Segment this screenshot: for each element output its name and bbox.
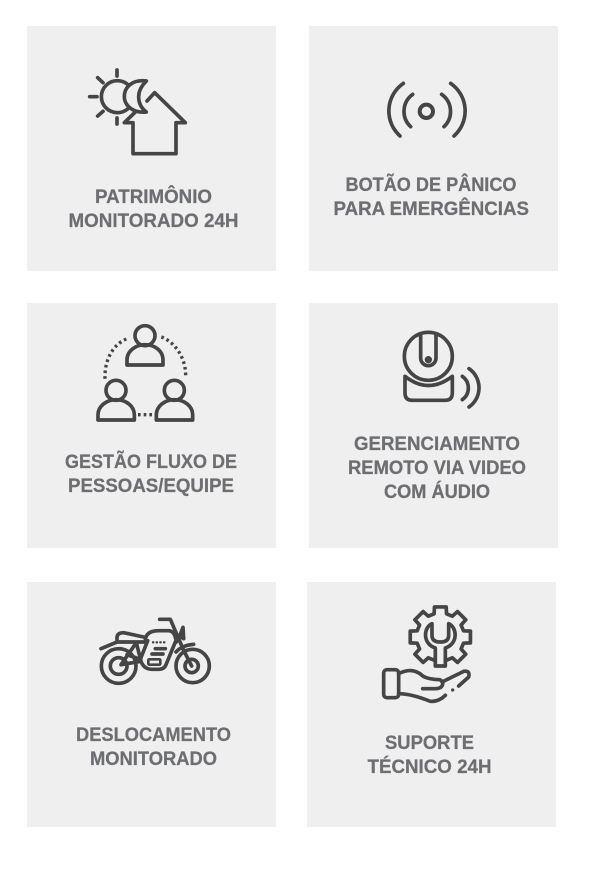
icon: three connected people xyxy=(98,326,193,420)
icon: dome camera with sound waves xyxy=(404,332,479,407)
label: gerenciamento remoto via video com áudio: REMOTO VIA VIDEO xyxy=(348,458,526,479)
panel: gerenciamento remoto xyxy=(309,303,558,548)
label: patrimônio monitorado 24h: MONITORADO 24H xyxy=(68,211,238,232)
label: suporte técnico 24h xyxy=(368,733,492,778)
label: deslocamento monitorado xyxy=(76,725,231,770)
label: deslocamento monitorado: MONITORADO xyxy=(90,749,217,770)
label: deslocamento monitorado: DESLOCAMENTO xyxy=(76,725,231,746)
label: gestão fluxo de pessoas/equipe xyxy=(65,451,237,497)
icon: gear and wrench over hand xyxy=(384,607,470,701)
label: suporte técnico 24h: TÉCNICO 24H xyxy=(368,756,492,778)
panel: gestão fluxo de pessoas xyxy=(27,303,276,548)
panel: deslocamento monitorado xyxy=(27,582,276,827)
label: gestão fluxo de pessoas/equipe: PESSOAS/EQUIPE xyxy=(68,476,234,497)
label: gestão fluxo de pessoas/equipe: GESTÃO FLUXO DE xyxy=(65,451,237,473)
label: gerenciamento remoto via video com áudio: COM ÁUDIO xyxy=(384,481,490,503)
label: patrimônio monitorado 24h: PATRIMÔNIO xyxy=(95,186,212,208)
panel: botão de pânico xyxy=(309,26,558,271)
label: gerenciamento remoto via video com áudio: GERENCIAMENTO xyxy=(354,434,520,455)
icon: motorcycle xyxy=(101,619,209,683)
icon: sun, moon and house xyxy=(90,70,185,154)
label: suporte técnico 24h: SUPORTE xyxy=(385,733,474,754)
label: gerenciamento remoto via video com áudio xyxy=(348,434,526,503)
panel: patrimônio monitorado xyxy=(27,26,276,271)
label: patrimônio monitorado 24h xyxy=(68,186,238,232)
panel: suporte técnico xyxy=(307,582,556,827)
label: botão de pânico para emergências xyxy=(334,174,529,220)
label: botão de pânico para emergências: PARA EMERGÊNCIAS xyxy=(334,198,529,220)
icon: alarm signal waves xyxy=(389,83,465,136)
label: botão de pânico para emergências: BOTÃO DE PÂNICO xyxy=(346,174,516,196)
